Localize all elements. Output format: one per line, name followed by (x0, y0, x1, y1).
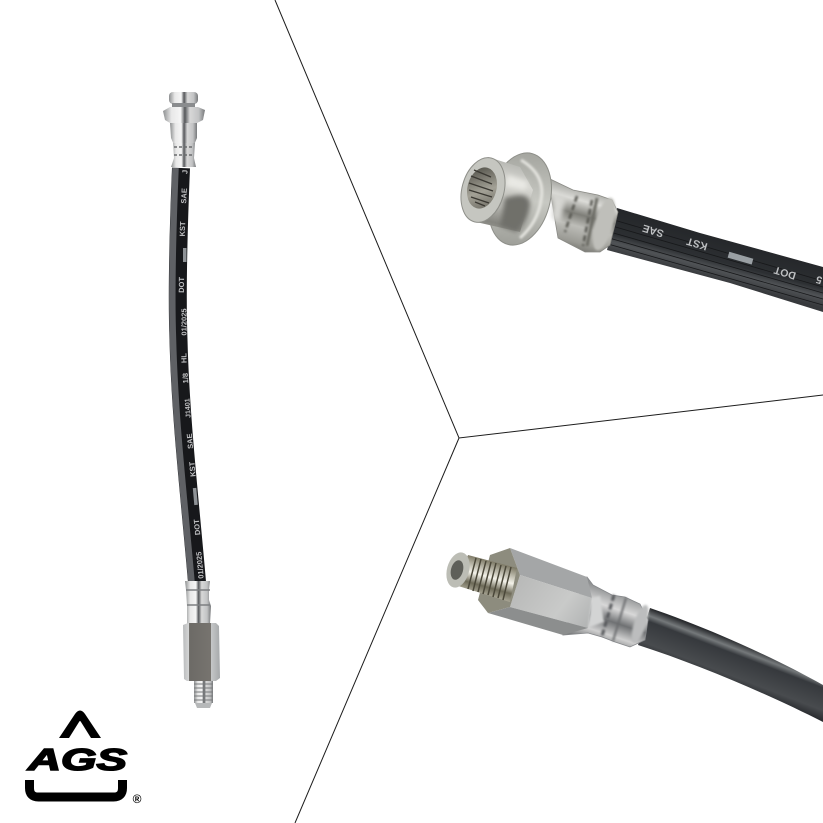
bottom hex fitting (183, 581, 220, 708)
detail: bottom hex fitting close-up (443, 548, 823, 722)
hose printed markings: 01/2025 (180, 308, 188, 336)
logo wordmark: AGS (27, 742, 127, 777)
close-up hex body (478, 548, 604, 635)
logo top chevron (59, 710, 101, 738)
hose printed markings: SAE (185, 433, 195, 449)
close-up hose with markings: SAE (641, 222, 665, 239)
close-up hose with markings: KST (685, 235, 709, 252)
close-up flange and port (454, 146, 561, 252)
hose printed markings: SAE (179, 188, 189, 204)
hose printed markings: HL (179, 353, 189, 363)
hose printed markings: J1401 (184, 398, 193, 418)
hose printed markings: DOT (192, 519, 202, 536)
hose printed markings: KST (178, 221, 187, 237)
hose printed markings: J (180, 170, 190, 174)
close-up hose with markings (607, 208, 823, 312)
close-up hose (638, 608, 823, 722)
hose printed markings: 01/2025 (194, 551, 206, 579)
AGS logo (27, 710, 142, 806)
hose printed markings (177, 170, 206, 579)
hose printed markings: DOT (177, 277, 186, 293)
logo bottom bracket (30, 780, 122, 797)
registered mark: ® (133, 792, 142, 806)
hose printed markings: KST (187, 461, 198, 477)
close-up crimp collar (548, 178, 620, 252)
close-up threaded tip (443, 550, 517, 602)
detail: top banjo fitting close-up (454, 146, 823, 312)
close-up hose with markings: DOT (772, 263, 798, 282)
close-up collar (563, 577, 652, 647)
full brake hose product photo (163, 92, 220, 708)
hose body (172, 168, 197, 582)
top banjo fitting (163, 92, 205, 167)
hose printed markings: 1/8 (181, 373, 190, 384)
